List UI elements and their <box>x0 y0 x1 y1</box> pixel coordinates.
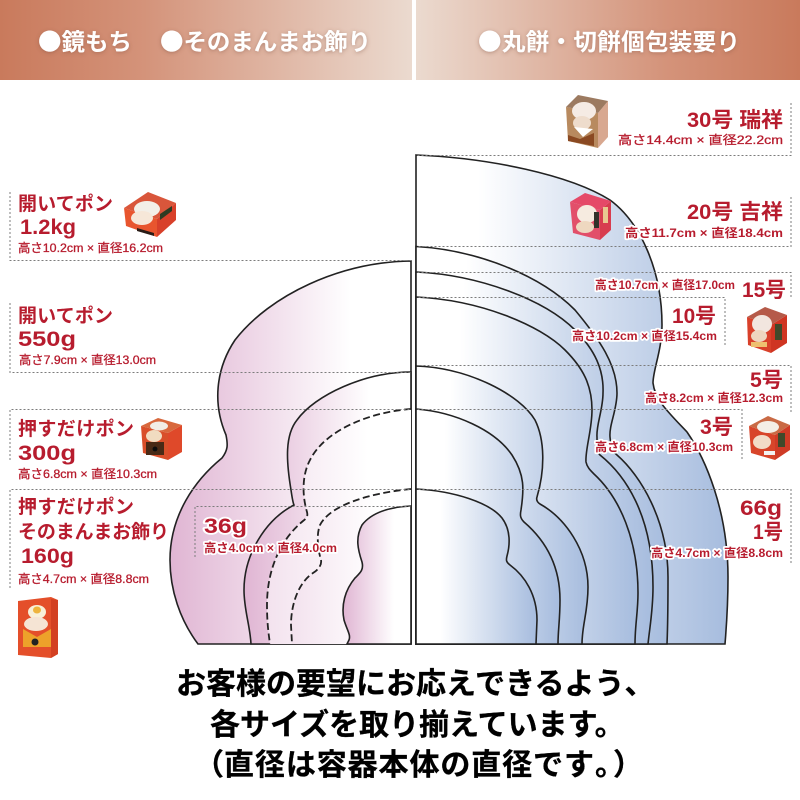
label: 66g size 1: 1号 <box>753 521 783 544</box>
silhouette: size 30 <box>416 155 728 644</box>
label: size 20 kissho: 高さ11.7cm × 直径18.4cm <box>625 225 783 240</box>
label: size 5 <box>645 369 783 405</box>
label: size 30 zuisho: 高さ14.4cm × 直径22.2cm <box>618 132 783 147</box>
label: 1.2kg open type: 開いてポン <box>18 192 113 215</box>
silhouette: size 15 <box>416 272 653 644</box>
label: 1.2kg open type: 1.2kg <box>20 216 76 239</box>
silhouette: 300g dashed <box>267 409 411 644</box>
text block: closing message <box>176 659 654 784</box>
label: size 15: 高さ10.7cm × 直径17.0cm <box>595 277 735 292</box>
label: 550g open type: 開いてポン <box>18 304 113 327</box>
silhouette: size 5 <box>416 366 588 644</box>
silhouette: 160g dashed <box>291 489 411 644</box>
label: size 20 kissho: 20号 吉祥 <box>687 201 783 224</box>
heading: round and cut mochi individually wrapped: ●丸餅・切餅個包装要り <box>478 23 740 57</box>
chart: right mochi silhouettes <box>416 155 728 644</box>
label: size 3: 高さ6.8cm × 直径10.3cm <box>595 439 733 454</box>
label: 300g push type: 押すだけポン <box>18 417 134 440</box>
label: 66g size 1 <box>651 497 783 560</box>
label: 160g push display type: 押すだけポン <box>18 495 134 518</box>
label: 1.2kg open type <box>18 192 163 255</box>
silhouette: size 3 <box>416 409 560 644</box>
label: size 10: 10号 <box>672 305 716 328</box>
label: size 5: 5号 <box>750 369 783 392</box>
label: size 15 <box>595 277 786 302</box>
silhouette: size 20 <box>416 246 668 644</box>
silhouette: size 1 <box>416 489 537 644</box>
silhouette: 36g <box>343 506 411 644</box>
label: size 3: 3号 <box>700 416 733 439</box>
icon: product box 300g <box>141 418 182 460</box>
icon: product box size 3 <box>749 416 790 460</box>
label: 160g push display type <box>18 495 169 586</box>
label: 66g size 1: 高さ4.7cm × 直径8.8cm <box>651 545 783 560</box>
label: 36g: 36g <box>204 515 247 538</box>
icon: product box 1.2kg <box>124 192 176 237</box>
label: size 5: 高さ8.2cm × 直径12.3cm <box>645 390 783 405</box>
text block: closing message: 各サイズを取り揃えています。 <box>210 700 625 744</box>
text block: closing message: （ <box>194 740 224 784</box>
icon: product box size 20 <box>570 193 611 240</box>
label: size 3 <box>595 416 733 454</box>
label: 550g open type <box>18 304 156 367</box>
icon: product box size 15 <box>747 307 787 353</box>
label: 300g push type <box>18 417 157 481</box>
label: size 30 zuisho <box>618 109 783 147</box>
label: 550g open type: 550g <box>18 328 76 351</box>
panel: left header band: ●そのまんまお飾り <box>160 23 371 57</box>
label: 160g push display type: 160g <box>21 545 74 568</box>
label: 36g: 高さ4.0cm × 直径4.0cm <box>204 540 337 555</box>
label: 1.2kg open type: 高さ10.2cm × 直径16.2cm <box>18 240 163 255</box>
label: size 10 <box>572 305 717 343</box>
silhouette: 1.2kg <box>170 261 411 644</box>
heading: kagami mochi and display type: ●鏡もち <box>38 23 132 57</box>
label: 160g push display type: そのまんまお飾り <box>18 520 169 543</box>
text block: closing message: お客様の要望にお応えできるよう、 <box>176 659 654 703</box>
text block: closing message: 。 <box>595 740 625 784</box>
label: 550g open type: 高さ7.9cm × 直径13.0cm <box>19 352 156 367</box>
chart: left mochi silhouettes <box>170 261 411 644</box>
panel: left header band <box>0 0 412 80</box>
text block: closing message: ） <box>613 740 643 784</box>
label: 300g push type: 高さ6.8cm × 直径10.3cm <box>18 466 157 481</box>
panel: right header band <box>416 0 800 80</box>
label: 160g push display type: 高さ4.7cm × 直径8.8cm <box>18 571 149 586</box>
silhouette: size 10 <box>416 297 638 644</box>
icon: product box 160g <box>18 597 58 658</box>
label: size 10: 高さ10.2cm × 直径15.4cm <box>572 328 717 343</box>
text block: closing message: 直径は容器本体の直径です <box>224 740 594 784</box>
label: size 15: 15号 <box>742 279 786 302</box>
silhouette: 550g <box>244 372 411 644</box>
icon: product box size 30 <box>566 95 608 148</box>
label: 36g <box>204 515 337 555</box>
label: 66g size 1: 66g <box>740 497 782 520</box>
label: size 20 kissho <box>625 201 783 240</box>
label: size 30 zuisho: 30号 瑞祥 <box>687 109 783 132</box>
label: 300g push type: 300g <box>18 442 76 465</box>
